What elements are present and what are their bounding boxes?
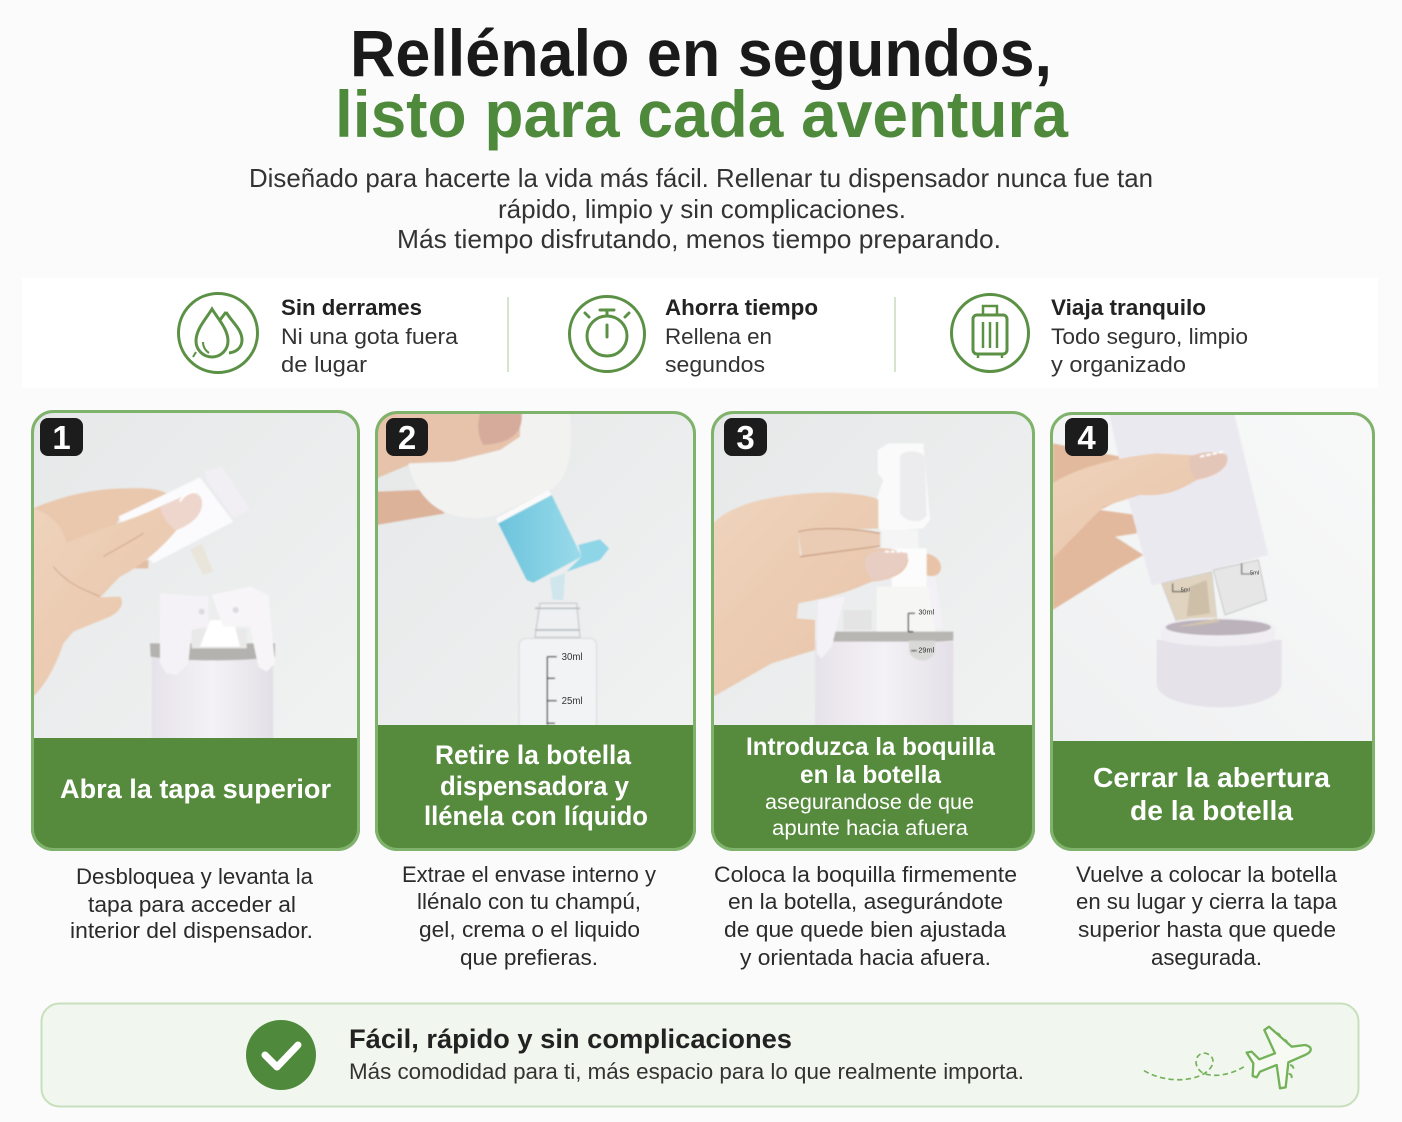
caption: step 4 — [1093, 762, 1330, 826]
photo: inserting nozzle — [714, 413, 1032, 725]
caption: step 4: de la botella — [1130, 795, 1293, 826]
panel: footer callout — [42, 1004, 1358, 1106]
green caption band — [1050, 741, 1375, 851]
text block: step 3 description: de que quede bien ajustada — [724, 917, 1007, 942]
caption: step 3: asegurandose de que — [765, 791, 974, 814]
text block: step 1 description: Desbloquea y levanta la — [76, 864, 314, 889]
subtitle text block: Más tiempo disfrutando, menos tiempo preparando. — [397, 224, 1001, 254]
bottle scale labels: 29ml — [918, 645, 935, 654]
bottle scale labels: 25ml — [562, 696, 583, 707]
step number 3: 3 — [736, 419, 755, 456]
text block: step 4 description: superior hasta que quede — [1078, 917, 1336, 942]
caption: step 3 — [746, 733, 996, 840]
green caption band — [711, 725, 1035, 851]
benefit text: ahorra tiempo: Rellena en — [665, 324, 772, 349]
text block: step 3 description: en la botella, asegurándote — [728, 889, 1003, 914]
text block: step 1 description: interior del dispensador. — [70, 918, 313, 943]
caption: step 3: apunte hacia afuera — [772, 817, 968, 840]
panel: benefits row — [22, 278, 1378, 388]
caption: step 4: Cerrar la abertura — [1093, 762, 1330, 793]
bottle scale labels: 5ml — [1250, 571, 1259, 577]
subtitle text block: Diseñado para hacerte la vida más fácil. Rellenar tu dispensador nunca fue tan — [249, 163, 1153, 193]
bottle scale labels — [918, 609, 934, 652]
step number 1: 1 — [52, 419, 71, 456]
icon: suitcase — [952, 294, 1028, 372]
step number 1 — [40, 418, 83, 456]
text block: step 3 description: Coloca la boquilla firmemente — [714, 862, 1017, 887]
footer heading: Fácil, rápido y sin complicaciones — [349, 1024, 792, 1054]
benefit text: sin derrames — [281, 295, 459, 377]
text block: step 2 description: llénalo con tu champú, — [417, 889, 641, 914]
benefit text: viaja tranquilo: Viaja tranquilo — [1051, 295, 1206, 320]
bottle scale labels: 30ml — [918, 607, 935, 616]
bottle scale labels — [1181, 571, 1259, 593]
step number 2: 2 — [398, 419, 416, 456]
caption: step 1: Abra la tapa superior — [60, 774, 331, 804]
caption: step 2: llénela con líquido — [424, 801, 648, 831]
text block: step 3 description: y orientada hacia afuera. — [740, 945, 991, 970]
benefit text: ahorra tiempo: Ahorra tiempo — [665, 295, 818, 320]
text block: step 4 description: asegurada. — [1151, 945, 1262, 970]
icon: water drops — [178, 294, 258, 372]
benefit text: viaja tranquilo — [1051, 295, 1248, 377]
photo: closing the bottle — [1053, 415, 1334, 741]
panel: step 1 — [30, 407, 363, 851]
panel: step 2 — [373, 407, 707, 851]
benefit text: viaja tranquilo: Todo seguro, limpio — [1051, 324, 1248, 349]
benefit text: sin derrames: de lugar — [281, 352, 367, 377]
caption: step 3: en la botella — [800, 761, 942, 789]
step number 2 — [386, 418, 428, 456]
text block: step 2 description: Extrae el envase interno y — [402, 862, 656, 887]
title: Rellénalo en segundos, — [350, 16, 1052, 90]
footer text: Más comodidad para ti, más espacio para lo que realmente importa. — [349, 1059, 1024, 1084]
photo: filling bottle — [376, 412, 693, 725]
panel: step 3 — [708, 407, 1042, 851]
text block: step 2 description: gel, crema o el liquido — [419, 917, 640, 942]
text block: step 4 description — [1076, 862, 1338, 970]
caption: step 2: Retire la botella — [435, 740, 632, 770]
text block: step 4 description: Vuelve a colocar la botella — [1076, 862, 1338, 887]
green caption band — [375, 725, 696, 851]
bottle scale labels: 5ml — [1181, 587, 1190, 593]
photo: hand opening dispenser — [30, 407, 363, 743]
caption: step 2 — [424, 740, 648, 831]
text block: step 3 description — [714, 862, 1017, 970]
icon: airplane with dashed trail — [1144, 1027, 1311, 1088]
subtitle text block: rápido, limpio y sin complicaciones. — [498, 194, 906, 224]
text block: step 4 description: en su lugar y cierra la tapa — [1076, 889, 1338, 914]
title — [335, 16, 1069, 151]
icon: check mark — [246, 1020, 316, 1090]
subtitle text block — [249, 163, 1153, 254]
text block: step 2 description: que prefieras. — [460, 945, 598, 970]
text block: step 1 description: tapa para acceder al — [88, 892, 296, 917]
benefit text: viaja tranquilo: y organizado — [1051, 352, 1186, 377]
green caption band — [31, 738, 360, 851]
caption: step 3: Introduzca la boquilla — [746, 733, 996, 761]
bottle scale labels: 30ml — [562, 652, 583, 663]
benefit text: sin derrames: Ni una gota fuera — [281, 324, 459, 349]
text block: step 2 description — [402, 862, 656, 970]
benefit text: sin derrames: Sin derrames — [281, 295, 422, 320]
caption: step 2: dispensadora y — [440, 771, 629, 801]
icon: stopwatch — [570, 296, 644, 372]
step number 4: 4 — [1077, 419, 1096, 456]
title: listo para cada aventura — [335, 77, 1069, 151]
bottle scale labels — [562, 652, 582, 704]
benefit text: ahorra tiempo — [665, 295, 818, 377]
step number 4 — [1065, 418, 1108, 456]
benefit text: ahorra tiempo: segundos — [665, 352, 765, 377]
panel: step 4 — [1047, 407, 1380, 851]
step number 3 — [724, 418, 767, 456]
text block: step 1 description — [70, 864, 314, 943]
